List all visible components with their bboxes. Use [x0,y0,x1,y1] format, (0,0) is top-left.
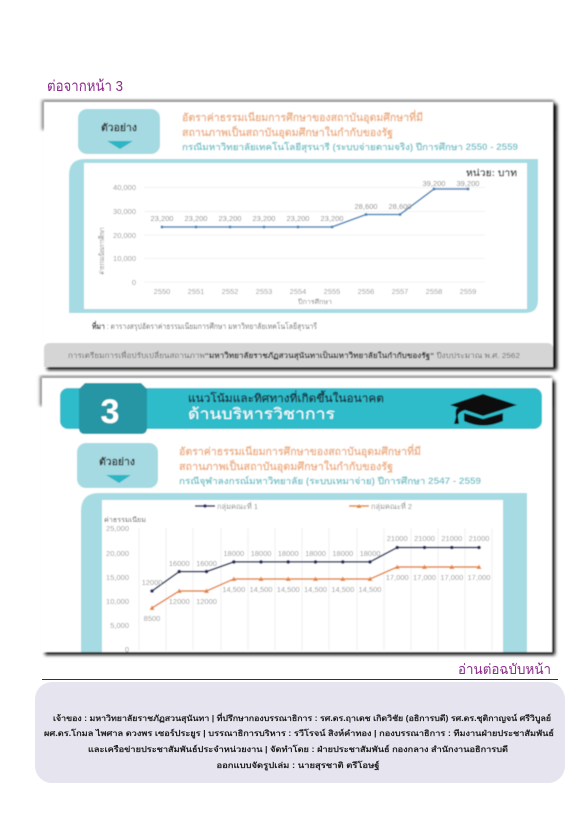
badge: example [78,109,160,154]
legend [195,501,412,511]
header band: ด้านบริหารวิชาการ [188,406,335,423]
badge: example: ตัวอย่าง [101,122,137,134]
line chart: tuition 2550-2559: 23,200 [321,214,343,223]
line chart: tuition 2547-2559: 16000 [196,559,217,568]
footer strip [44,343,553,367]
section number 3 [79,383,147,434]
line chart: tuition 2550-2559: 2555 [324,287,340,296]
line chart: tuition 2550-2559: 23,200 [287,214,309,223]
text block: chart title [182,109,518,153]
text block: credits: และเครือข่ายประชาสัมพันธ์ประจำหน่วยงาน | จัดทำโดย : ฝ่ายประชาสัมพันธ์ กองกลาง สำนักงานอธิการบดี [88,744,508,754]
legend: กลุ่มคณะที่ 1 [217,501,258,511]
line chart: tuition 2550-2559: 40,000 [113,183,136,192]
line chart: tuition 2550-2559: 23,200 [219,214,241,223]
line chart: tuition 2547-2559: 17,000 [413,573,436,582]
line chart: tuition 2547-2559 [104,501,492,654]
line chart: tuition 2547-2559: 14,500 [250,585,272,594]
text block: chart title: กรณีจุฬาลงกรณ์มหาวิทยาลัย (ระบบเหมาจ่าย) ปีการศึกษา 2547 - 2559 [179,475,481,487]
panel: credits [35,682,565,783]
line chart: tuition 2547-2559: ค่าธรรมเนียม [104,516,146,524]
line chart: tuition 2550-2559: 2552 [222,287,238,296]
line chart: tuition 2547-2559: 18000 [251,549,271,558]
line chart: tuition 2550-2559: ปีการศึกษา [297,298,332,306]
text block: credits: ผศ.ดร.โกมล ไพศาล ดวงพร เซอร์ประยูร | บรรณาธิการบริหาร : รวีโรจน์ สิงห์คำทอง | กองบรรณาธิการ : ทีมงานฝ่ายประชาสัมพันธ์ [44,728,554,739]
line chart: tuition 2547-2559: 14,500 [359,585,381,594]
line chart: tuition 2547-2559: 21000 [441,534,462,543]
text block: credits: เจ้าของ : มหาวิทยาลัยราชภัฏสวนสุนันทา | ที่ปรึกษากองบรรณาธิการ : รศ.ดร.ฤาเดช เกิดวิชัย (อธิการบดี) รศ.ดร.ชุติกาญจน์ ศรีวิบูลย์ [53,712,551,724]
text block: credits [44,712,554,771]
text block: chart title: สถานภาพเป็นสถาบันอุดมศึกษาในกำกับของรัฐ [182,125,393,140]
source note: ที่มา : ตารางสรุปอัตราค่าธรรมเนียมการศึกษา มหาวิทยาลัยเทคโนโลยีสุรนารี [92,320,318,331]
line chart: tuition 2547-2559: 21000 [469,534,489,543]
line chart: tuition 2550-2559: 2559 [460,287,476,296]
line chart: tuition 2547-2559: 20,000 [106,549,129,558]
text block: chart title: กรณีมหาวิทยาลัยเทคโนโลยีสุรนารี (ระบบจ่ายตามจริง) ปีการศึกษา 2550 - 2559 [182,141,518,153]
line chart: tuition 2550-2559: 28,600 [389,202,411,211]
line chart: tuition 2547-2559: 14,500 [277,585,300,594]
line chart: tuition 2547-2559: 17,000 [440,573,463,582]
line chart: tuition 2550-2559: 30,000 [113,207,136,216]
chart frame [81,493,527,652]
line chart: tuition 2547-2559: 0 [125,645,129,654]
line chart: tuition 2547-2559: 14,500 [222,585,245,594]
line chart: tuition 2547-2559: 18000 [278,549,299,558]
line chart: tuition 2547-2559: 12000 [142,578,162,587]
panel: example university of technology suranaree [42,100,557,370]
line chart: tuition 2547-2559: 17,000 [386,573,409,582]
line chart: tuition 2547-2559: 21000 [387,534,408,543]
text block: chart title: สถานภาพเป็นสถาบันอุดมศึกษาในกำกับของรัฐ [179,459,393,474]
line chart: tuition 2550-2559: 23,200 [151,214,173,223]
text block: chart title: อัตราค่าธรรมเนียมการศึกษาของสถาบันอุดมศึกษาที่มี [179,443,421,459]
line chart: tuition 2550-2559: 2551 [188,287,204,296]
line chart: tuition 2550-2559: ค่าธรรมเนียมการศึกษา [97,227,106,274]
chart frame [69,159,538,313]
badge: example [77,443,158,488]
header band: แนวโน้มและทิศทางที่เกิดขึ้นในอนาคต [188,390,384,405]
icon: graduation cap [450,394,517,426]
panel: trends and academic administration [40,376,555,655]
line chart: tuition 2547-2559: 14,500 [304,585,327,594]
line chart: tuition 2547-2559: 12000 [169,597,190,606]
text block: credits: ออกแบบจัดรูปเล่ม : นายสุรชาติ ตรีโอษฐ์ [216,760,380,771]
line chart: tuition 2550-2559: 2553 [256,287,272,296]
header band [60,383,542,434]
heading: continued from page 3: ต่อจากหน้า 3 [47,78,123,95]
section number 3: 3 [101,393,119,431]
line chart: tuition 2547-2559: 12000 [196,597,217,606]
line chart: tuition 2547-2559: 14,500 [331,585,354,594]
line chart: tuition 2547-2559: 18000 [360,549,380,558]
line chart: tuition 2550-2559: 2558 [426,287,442,296]
legend: กลุ่มคณะที่ 2 [371,501,412,511]
line chart: tuition 2550-2559: 20,000 [113,231,136,240]
line chart: tuition 2550-2559: 2554 [290,287,306,296]
line chart: tuition 2547-2559: 17,000 [468,573,490,582]
text block: chart title [179,443,481,487]
line chart: tuition 2547-2559: 10,000 [106,597,129,606]
line chart: tuition 2547-2559: 18000 [305,549,326,558]
line chart: tuition 2550-2559: 39,200 [423,179,445,188]
footer strip: การเตรียมการเพื่อปรับเปลี่ยนสถานภาพ “มหาวิทยาลัยราชภัฏสวนสุนันทาเป็นมหาวิทยาลัยในกำกับของรัฐ” ปีงบประมาณ พ.ศ. 2562 [68,350,520,361]
line chart: tuition 2550-2559: 23,200 [253,214,275,223]
line chart: tuition 2550-2559: 28,600 [355,202,377,211]
line chart: tuition 2547-2559: 25,000 [106,524,129,533]
line chart: tuition 2550-2559: 10,000 [113,254,136,263]
line chart: tuition 2547-2559: 15,000 [106,573,129,582]
line chart: tuition 2550-2559: 2550 [154,287,170,296]
line chart: tuition 2550-2559: 23,200 [185,214,207,223]
line chart: tuition 2550-2559: 2557 [392,287,408,296]
line chart: tuition 2547-2559: 5,000 [110,621,129,630]
text block: chart title: อัตราค่าธรรมเนียมการศึกษาของสถาบันอุดมศึกษาที่มี [182,109,423,125]
line chart: tuition 2547-2559: 16000 [169,559,190,568]
line chart: tuition 2550-2559: 0 [132,278,136,287]
line chart: tuition 2547-2559: 21000 [414,534,435,543]
badge: example: ตัวอย่าง [99,456,135,468]
line chart: tuition 2550-2559: 39,200 [457,179,479,188]
line chart: tuition 2547-2559: 18000 [223,549,244,558]
line chart: tuition 2547-2559: 8500 [144,614,160,623]
line chart: tuition 2547-2559: 18000 [332,549,353,558]
line chart: tuition 2550-2559: 2556 [358,287,374,296]
continued next issue: อ่านต่อฉบับหน้า [458,661,551,677]
line chart: tuition 2550-2559 [97,179,485,306]
unit label: หน่วย: บาท [466,168,517,179]
